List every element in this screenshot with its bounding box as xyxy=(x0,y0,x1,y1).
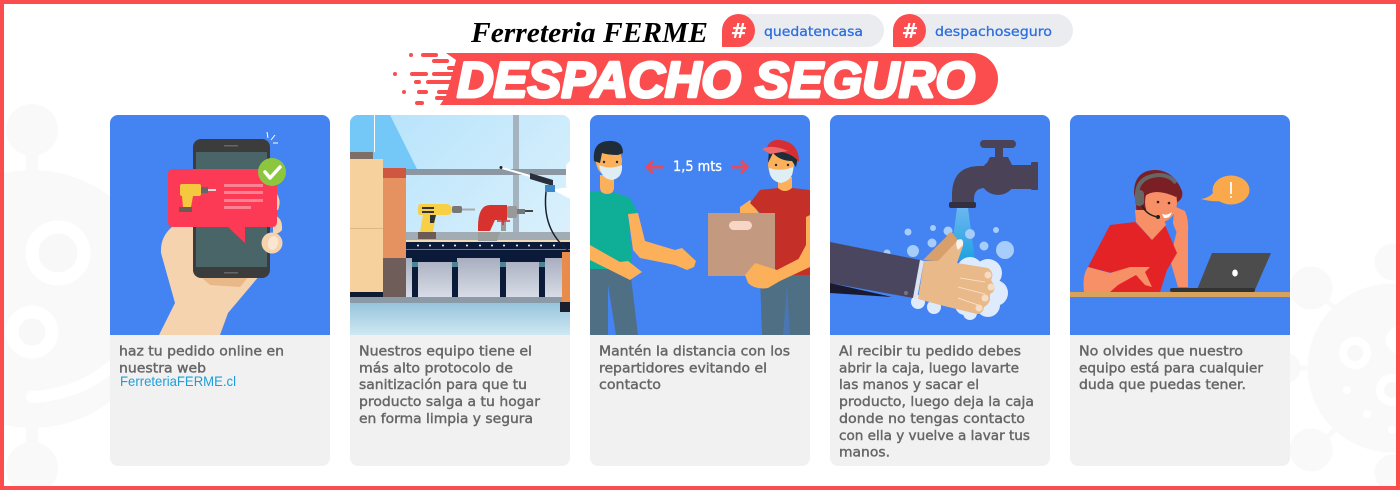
icon: red message bubble with drill xyxy=(168,169,277,243)
text: lavado: producto, luego deja la caja xyxy=(839,395,1034,410)
text: dudas: duda que puedas tener. xyxy=(1079,378,1246,393)
arrow: left xyxy=(647,161,663,173)
icon: faucet xyxy=(949,140,1038,208)
hashtag pill: quedatencasa xyxy=(722,14,884,47)
desk xyxy=(1070,292,1290,297)
icon: soapy foam xyxy=(911,257,1008,320)
text: protocolo: Nuestros equipo tiene el xyxy=(359,344,532,360)
text: distancia: Mantén la distancia con los xyxy=(599,344,790,360)
panel 2: sanitizacion xyxy=(350,115,570,466)
panel 4: lavado de manos xyxy=(830,115,1050,466)
icon: soap bubbles xyxy=(884,225,1014,259)
icon: support agent xyxy=(1084,170,1188,292)
icon: hand holding phone xyxy=(159,139,282,335)
text: pedido online xyxy=(119,344,284,389)
icon: sanitizing sprayer xyxy=(500,161,570,312)
text: protocolo xyxy=(359,344,541,427)
text: dudas xyxy=(1079,344,1264,393)
icon: green check xyxy=(258,158,286,186)
hashtag pill: despachoseguro: despachoseguro xyxy=(935,25,1052,40)
icon: laptop xyxy=(1170,253,1271,292)
icon: customer with mask xyxy=(590,141,696,335)
text: dudas: equipo está para cualquier xyxy=(1079,361,1264,376)
text: pedido online: haz tu pedido online en xyxy=(119,344,284,360)
hashtag pill: despachoseguro: # xyxy=(902,19,918,43)
floor xyxy=(350,297,570,335)
text: protocolo: más alto protocolo de xyxy=(359,361,513,376)
icon: delivery person with box xyxy=(708,140,810,335)
conveyor belt xyxy=(406,232,570,297)
hashtag pill: despachoseguro xyxy=(893,14,1073,47)
text: lavado: con ella y vuelve a lavar tus xyxy=(839,429,1030,444)
text: lavado: donde no tengas contacto xyxy=(839,412,1025,427)
text: protocolo: en forma limpia y segura xyxy=(359,412,533,427)
text: lavado: Al recibir tu pedido debes xyxy=(839,344,1021,360)
text: lavado xyxy=(839,344,1034,461)
arrow: right xyxy=(731,161,747,173)
text: pedido online: FerreteriaFERME.cl xyxy=(120,373,236,389)
text: lavado: abrir la caja, luego lavarte xyxy=(839,361,1019,376)
text: lavado: las manos y sacar el xyxy=(839,378,979,393)
text: protocolo: producto salga a tu hogar xyxy=(359,395,541,410)
icon: speech bubble with exclamation xyxy=(1201,176,1250,204)
hashtag pill: quedatencasa: # xyxy=(731,19,747,43)
text: dudas: No olvides que nuestro xyxy=(1079,344,1243,360)
title: Ferreteria FERME: Ferreteria FERME xyxy=(470,17,708,49)
text: lavado: manos. xyxy=(839,446,890,461)
panel 3: distancia xyxy=(590,115,810,466)
panel 1: pedido online xyxy=(110,115,330,466)
text: protocolo: sanitización para que tu xyxy=(359,378,527,393)
icon: sparkle lines xyxy=(267,132,278,143)
hashtag pill: quedatencasa: quedatencasa xyxy=(764,25,863,40)
text: pedido online: nuestra web xyxy=(119,361,206,376)
icon: red drill xyxy=(478,205,533,241)
icon: arm and hand xyxy=(830,232,994,314)
label: 1,5 mts: 1,5 mts xyxy=(673,159,722,175)
stacked boxes xyxy=(350,152,406,297)
background: left virus xyxy=(0,104,161,490)
banner: DESPACHO SEGURO: DESPACHO SEGURO xyxy=(457,52,975,108)
text: distancia xyxy=(599,344,790,393)
text: distancia: contacto xyxy=(599,378,661,393)
factory window xyxy=(350,115,567,232)
icon: yellow drill xyxy=(418,204,475,239)
background: right virus xyxy=(1272,246,1400,489)
panel 5: atencion al cliente xyxy=(1070,115,1290,466)
icon: water stream xyxy=(954,208,975,260)
text: distancia: repartidores evitando el xyxy=(599,361,767,376)
